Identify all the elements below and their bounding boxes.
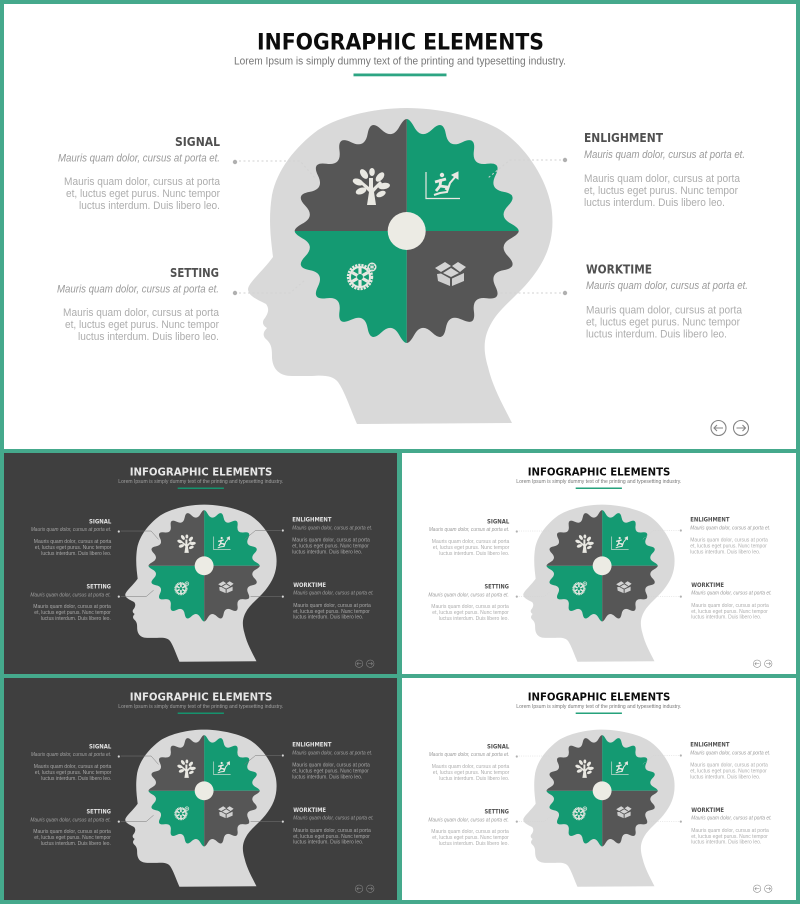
text block: signal: Mauris quam dolor, cursus at porta [64,176,221,188]
text block: signal [58,134,221,212]
slide content: dark row 3: Lorem Ipsum is simply dummy text of the printing and typesetting industry. [118,704,284,710]
slide content: dark row 2: INFOGRAPHIC ELEMENTS [130,466,272,479]
panel: main white slide [4,4,796,449]
slide content: dark row 2: Mauris quam dolor, cursus at porta [33,604,112,610]
slide content: dark row 3: et, luctus eget purus. Nunc tempor [292,768,369,774]
slide content: dark row 3 [30,691,374,892]
text block: worktime: et, luctus eget purus. Nunc tempor [586,316,740,328]
slide content: dark row 3: Mauris quam dolor, cursus at porta et. [30,817,111,823]
slide content: white row 2: Lorem Ipsum is simply dummy text of the printing and typesetting industry. [516,479,682,485]
slide content: dark row 2: Mauris quam dolor, cursus at porta [293,603,372,609]
slide content: dark row 3: Mauris quam dolor, cursus at porta et. [31,752,111,758]
slide content: dark row 3: SIGNAL [89,744,111,751]
slide content: white row 2: WORKTIME [691,582,724,589]
slide content: dark row 2: Mauris quam dolor, cursus at porta [292,537,371,543]
slide content: dark row 2: et, luctus eget purus. Nunc tempor [293,609,370,615]
slide content: dark row 3: luctus interdum. Duis libero leo. [292,774,363,780]
slide content: white row 2: et, luctus eget purus. Nunc tempor [432,610,509,616]
slide content: dark row 2 [30,466,374,667]
slide content: white row 2: SETTING [484,584,509,591]
text block: setting: et, luctus eget purus. Nunc tempor [65,319,219,331]
slide content: white row 3: INFOGRAPHIC ELEMENTS [528,691,670,704]
text block: signal: et, luctus eget purus. Nunc tempor [66,188,220,200]
slide content: white row 3: et, luctus eget purus. Nunc tempor [432,835,509,841]
slide content: white row 2: ENLIGHMENT [690,517,730,524]
text block: setting: SETTING [170,265,219,280]
slide content: dark row 2: et, luctus eget purus. Nunc tempor [35,545,112,551]
slide content: dark row 2: Mauris quam dolor, cursus at porta et. [293,591,374,597]
slide content: white row 3: Mauris quam dolor, cursus at porta [431,829,510,835]
slide content: white row 3: Lorem Ipsum is simply dummy text of the printing and typesetting industry. [516,704,682,710]
slide content: dark row 3: luctus interdum. Duis libero leo. [41,776,112,782]
panel: white slide, row 3 [402,678,796,900]
slide content: dark row 2: Lorem Ipsum is simply dummy text of the printing and typesetting industry. [118,479,284,485]
text block: enlighment: Mauris quam dolor, cursus at porta [584,173,741,185]
panel: white slide, row 2 [402,453,796,674]
subtitle: Lorem Ipsum is simply dummy text of the printing and typesetting industry. [234,56,566,68]
slide content: dark row 3: SETTING [86,809,111,816]
slide content: white row 2: luctus interdum. Duis libero leo. [690,549,761,555]
slide content: white row 3: luctus interdum. Duis libero leo. [439,776,510,782]
slide content: white row 2: Mauris quam dolor, cursus at porta [432,539,510,545]
slide content: dark row 2: WORKTIME [293,582,326,589]
slide content: white row 2: Mauris quam dolor, cursus at porta et. [428,592,509,598]
slide content: dark row 2: SETTING [86,584,111,591]
slide content: dark row 3: ENLIGHMENT [292,742,332,749]
text block: enlighment [584,130,745,209]
slide content: white row 3: Mauris quam dolor, cursus at porta et. [428,817,509,823]
slide content: white row 2: Mauris quam dolor, cursus at porta et. [429,527,509,533]
slide content: white row 3: SIGNAL [487,744,509,751]
text block: enlighment: et, luctus eget purus. Nunc tempor [584,185,738,197]
slide content: white row 3: luctus interdum. Duis libero leo. [690,774,761,780]
text block: setting: Mauris quam dolor, cursus at porta et. [57,284,219,296]
slide content: dark row 2: et, luctus eget purus. Nunc tempor [34,610,111,616]
panel: dark slide, row 3 [4,678,397,900]
slide content: dark row 3: et, luctus eget purus. Nunc tempor [293,834,370,840]
text block: enlighment: Mauris quam dolor, cursus at porta et. [584,149,745,161]
slide content: white row 2: Mauris quam dolor, cursus at porta [691,603,770,609]
text block: signal: luctus interdum. Duis libero leo. [79,200,220,212]
slide content: dark row 2: et, luctus eget purus. Nunc tempor [292,543,369,549]
slide content: dark row 3: Mauris quam dolor, cursus at porta [33,829,112,835]
slide content: dark row 2: luctus interdum. Duis libero leo. [41,551,112,557]
text block: setting: Mauris quam dolor, cursus at porta [63,307,220,319]
slide content: dark row 3: luctus interdum. Duis libero leo. [41,841,111,847]
text block: setting: luctus interdum. Duis libero leo. [78,331,219,343]
slide content: white row 3: SETTING [484,809,509,816]
slide content: dark row 3: Mauris quam dolor, cursus at porta [34,764,112,770]
slide content: dark row 3: Mauris quam dolor, cursus at porta et. [293,816,374,822]
slide content: white row 2: luctus interdum. Duis libero leo. [439,551,510,557]
slide content: white row 3 [428,691,772,892]
text block: worktime: Mauris quam dolor, cursus at porta [586,304,743,316]
slide content: white row 2: et, luctus eget purus. Nunc tempor [690,543,767,549]
text block: worktime: WORKTIME [586,262,652,276]
slide content: dark row 3: INFOGRAPHIC ELEMENTS [130,691,272,704]
slide content: dark row 2: Mauris quam dolor, cursus at porta et. [30,592,111,598]
slide content: white row 2: luctus interdum. Duis libero leo. [691,615,762,621]
text block: setting [57,265,220,343]
slide content: white row 2: Mauris quam dolor, cursus at porta [690,537,769,543]
text block: signal: SIGNAL [175,134,220,149]
slide content: white row 3: et, luctus eget purus. Nunc tempor [691,834,768,840]
navigation arrows [711,420,748,436]
slide content: white row 3: Mauris quam dolor, cursus at porta et. [429,752,509,758]
slide content: white row 3: luctus interdum. Duis libero leo. [439,841,509,847]
slide content: dark row 2: Mauris quam dolor, cursus at porta et. [292,526,372,532]
slide content: white row 3: et, luctus eget purus. Nunc tempor [433,770,510,776]
slide content: dark row 3: luctus interdum. Duis libero leo. [293,840,364,846]
slide content: white row 2: et, luctus eget purus. Nunc tempor [433,545,510,551]
slide content: white row 2: et, luctus eget purus. Nunc tempor [691,609,768,615]
slide content: white row 2: INFOGRAPHIC ELEMENTS [528,466,670,479]
slide content: dark row 2: luctus interdum. Duis libero leo. [41,616,111,622]
slide content: white row 3: ENLIGHMENT [690,742,730,749]
slide content: white row 3: Mauris quam dolor, cursus at porta [690,762,769,768]
slide content: white row 2: SIGNAL [487,519,509,526]
slide content: white row 3: Mauris quam dolor, cursus at porta et. [691,816,772,822]
slide content: white row 3: Mauris quam dolor, cursus at porta [691,828,770,834]
slide content: white row 3: Mauris quam dolor, cursus at porta et. [690,751,770,757]
slide content: white row 2: Mauris quam dolor, cursus at porta et. [690,526,770,532]
slide content: dark row 2: luctus interdum. Duis libero leo. [292,549,363,555]
slide content: white row 3: et, luctus eget purus. Nunc tempor [690,768,767,774]
text block: worktime [586,262,748,340]
slide content: dark row 2: Mauris quam dolor, cursus at porta et. [31,527,111,533]
slide content: white row 2: luctus interdum. Duis libero leo. [439,616,509,622]
text block: enlighment: ENLIGHMENT [584,130,663,145]
text block: worktime: luctus interdum. Duis libero leo. [586,328,727,340]
slide content: dark row 3: et, luctus eget purus. Nunc tempor [35,770,112,776]
connector lines [233,158,567,295]
slide content: white row 2 [428,466,772,667]
slide content: white row 2: Mauris quam dolor, cursus at porta et. [691,591,772,597]
text block: worktime: Mauris quam dolor, cursus at porta et. [586,280,748,292]
slide content: white row 3: luctus interdum. Duis libero leo. [691,840,762,846]
slide content: dark row 3: WORKTIME [293,807,326,814]
panel: dark slide, row 2 [4,453,397,674]
slide content: white row 2: Mauris quam dolor, cursus at porta [431,604,510,610]
text block: signal: Mauris quam dolor, cursus at porta et. [58,152,220,164]
text block: enlighment: luctus interdum. Duis libero leo. [584,197,725,209]
slide content: dark row 3: Mauris quam dolor, cursus at porta [292,762,371,768]
slide content: dark row 3: Mauris quam dolor, cursus at porta et. [292,751,372,757]
slide content: dark row 2: luctus interdum. Duis libero leo. [293,615,364,621]
slide content: dark row 2: Mauris quam dolor, cursus at porta [34,539,112,545]
slide content: white row 3: WORKTIME [691,807,724,814]
slide content: dark row 3: et, luctus eget purus. Nunc tempor [34,835,111,841]
head with gear and icons [248,108,552,424]
slide content: dark row 3: Mauris quam dolor, cursus at porta [293,828,372,834]
slide content: white row 3: Mauris quam dolor, cursus at porta [432,764,510,770]
slide content: dark row 2: SIGNAL [89,519,111,526]
title: INFOGRAPHIC ELEMENTS [257,30,544,56]
title underline [354,74,446,76]
slide content: dark row 2: ENLIGHMENT [292,517,332,524]
